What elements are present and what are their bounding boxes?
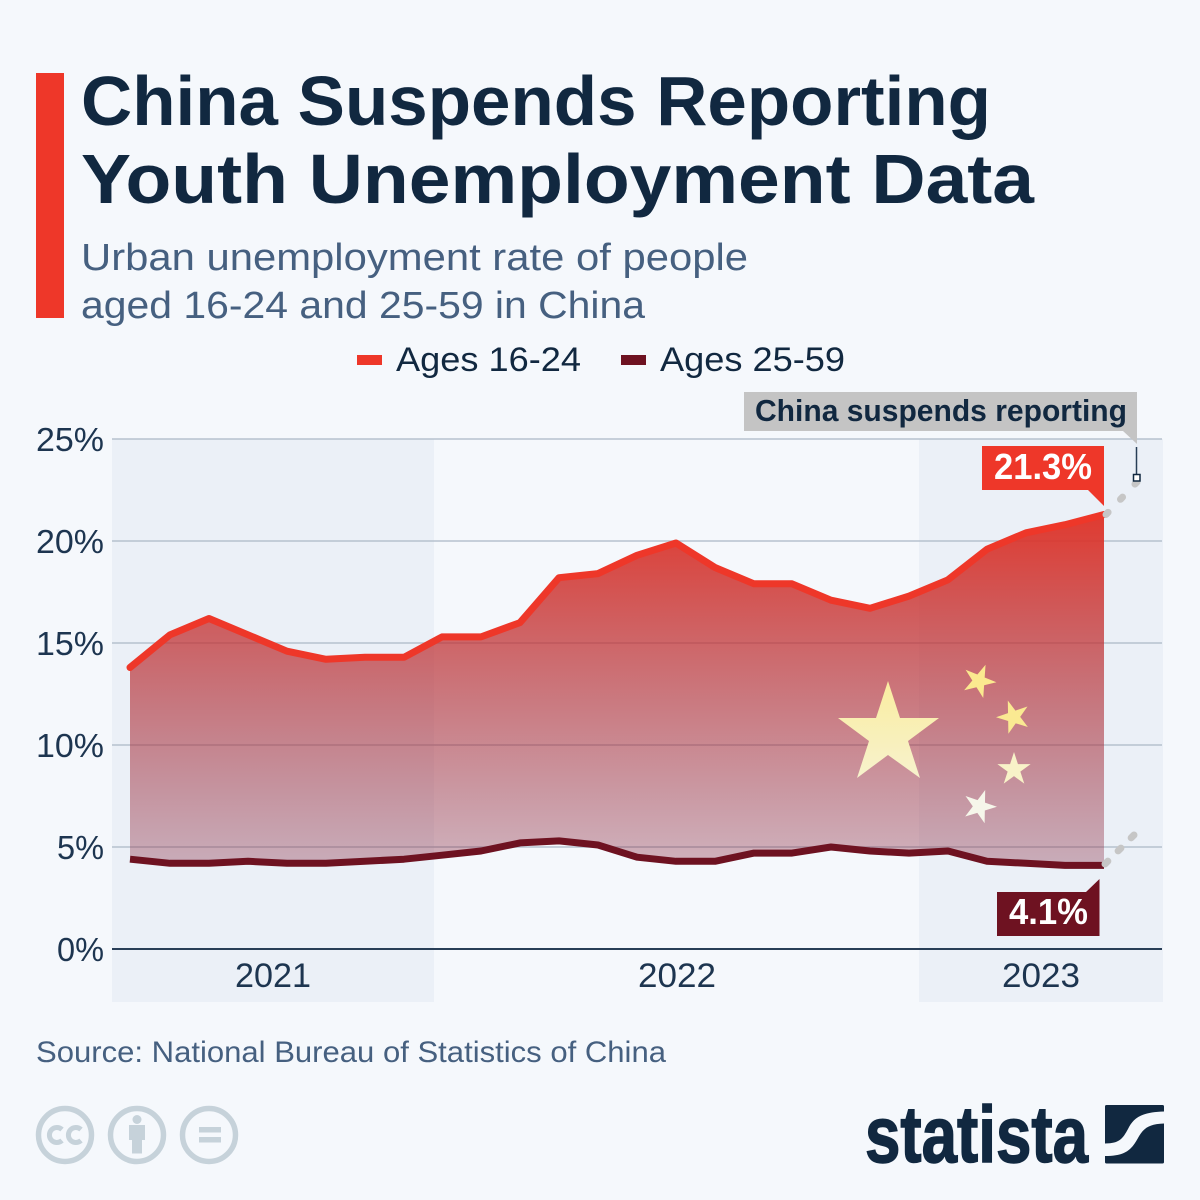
icon: no derivatives	[182, 1108, 236, 1162]
star: small 4	[959, 785, 1001, 825]
star: small 1	[958, 659, 1001, 700]
value label: 4.1%	[997, 879, 1100, 936]
y-axis labels	[36, 421, 104, 968]
subtitle: aged 16-24 and 25-59 in China	[81, 285, 646, 327]
area between the series	[130, 514, 1104, 865]
chart	[36, 392, 1163, 1002]
x axis	[112, 948, 1162, 950]
y-axis labels: 0%	[57, 931, 104, 968]
legend: ages 16-24: Ages 16-24	[396, 341, 581, 379]
y-axis labels: 10%	[36, 727, 104, 764]
line: ages 25-59	[130, 841, 1104, 865]
value label: 21.3%: 21.3%	[994, 446, 1092, 487]
icon: creative commons	[38, 1108, 92, 1162]
dotted projection: ages 16-24	[1106, 482, 1137, 514]
year labels: 2021	[235, 957, 311, 995]
value label: 4.1%: 4.1%	[1009, 891, 1088, 932]
y-axis labels: 20%	[36, 523, 104, 560]
title	[81, 62, 1035, 218]
icon: attribution	[110, 1108, 164, 1162]
logo mark	[1105, 1105, 1164, 1164]
callout: China suspends reporting	[744, 392, 1140, 481]
star: small 2	[992, 695, 1034, 736]
accent bar	[36, 73, 64, 318]
year labels: 2022	[638, 957, 716, 995]
logo wordmark: statista	[865, 1090, 1088, 1179]
dotted projection: ages 25-59	[1105, 833, 1136, 864]
line: ages 16-24	[130, 514, 1104, 668]
y-axis labels: 5%	[57, 829, 104, 866]
subtitle	[81, 237, 748, 327]
year labels	[235, 957, 1080, 995]
callout: China suspends reporting: China suspends reporting	[755, 393, 1127, 428]
title: Youth Unemployment Data	[81, 140, 1035, 218]
legend: ages 25-59: Ages 25-59	[660, 341, 845, 379]
year labels: 2023	[1002, 957, 1080, 995]
band: 2023	[919, 439, 1163, 1002]
legend	[357, 341, 845, 379]
title: China Suspends Reporting	[81, 62, 991, 140]
star: small 3	[997, 752, 1031, 784]
y-axis labels: 25%	[36, 421, 104, 458]
source: Source: National Bureau of Statistics of China	[36, 1036, 666, 1069]
y-axis labels: 15%	[36, 625, 104, 662]
star: large	[838, 681, 939, 778]
band: 2021	[112, 439, 434, 1002]
subtitle: Urban unemployment rate of people	[81, 237, 748, 279]
statista logo	[865, 1090, 1164, 1179]
value label: 21.3%	[982, 446, 1104, 506]
